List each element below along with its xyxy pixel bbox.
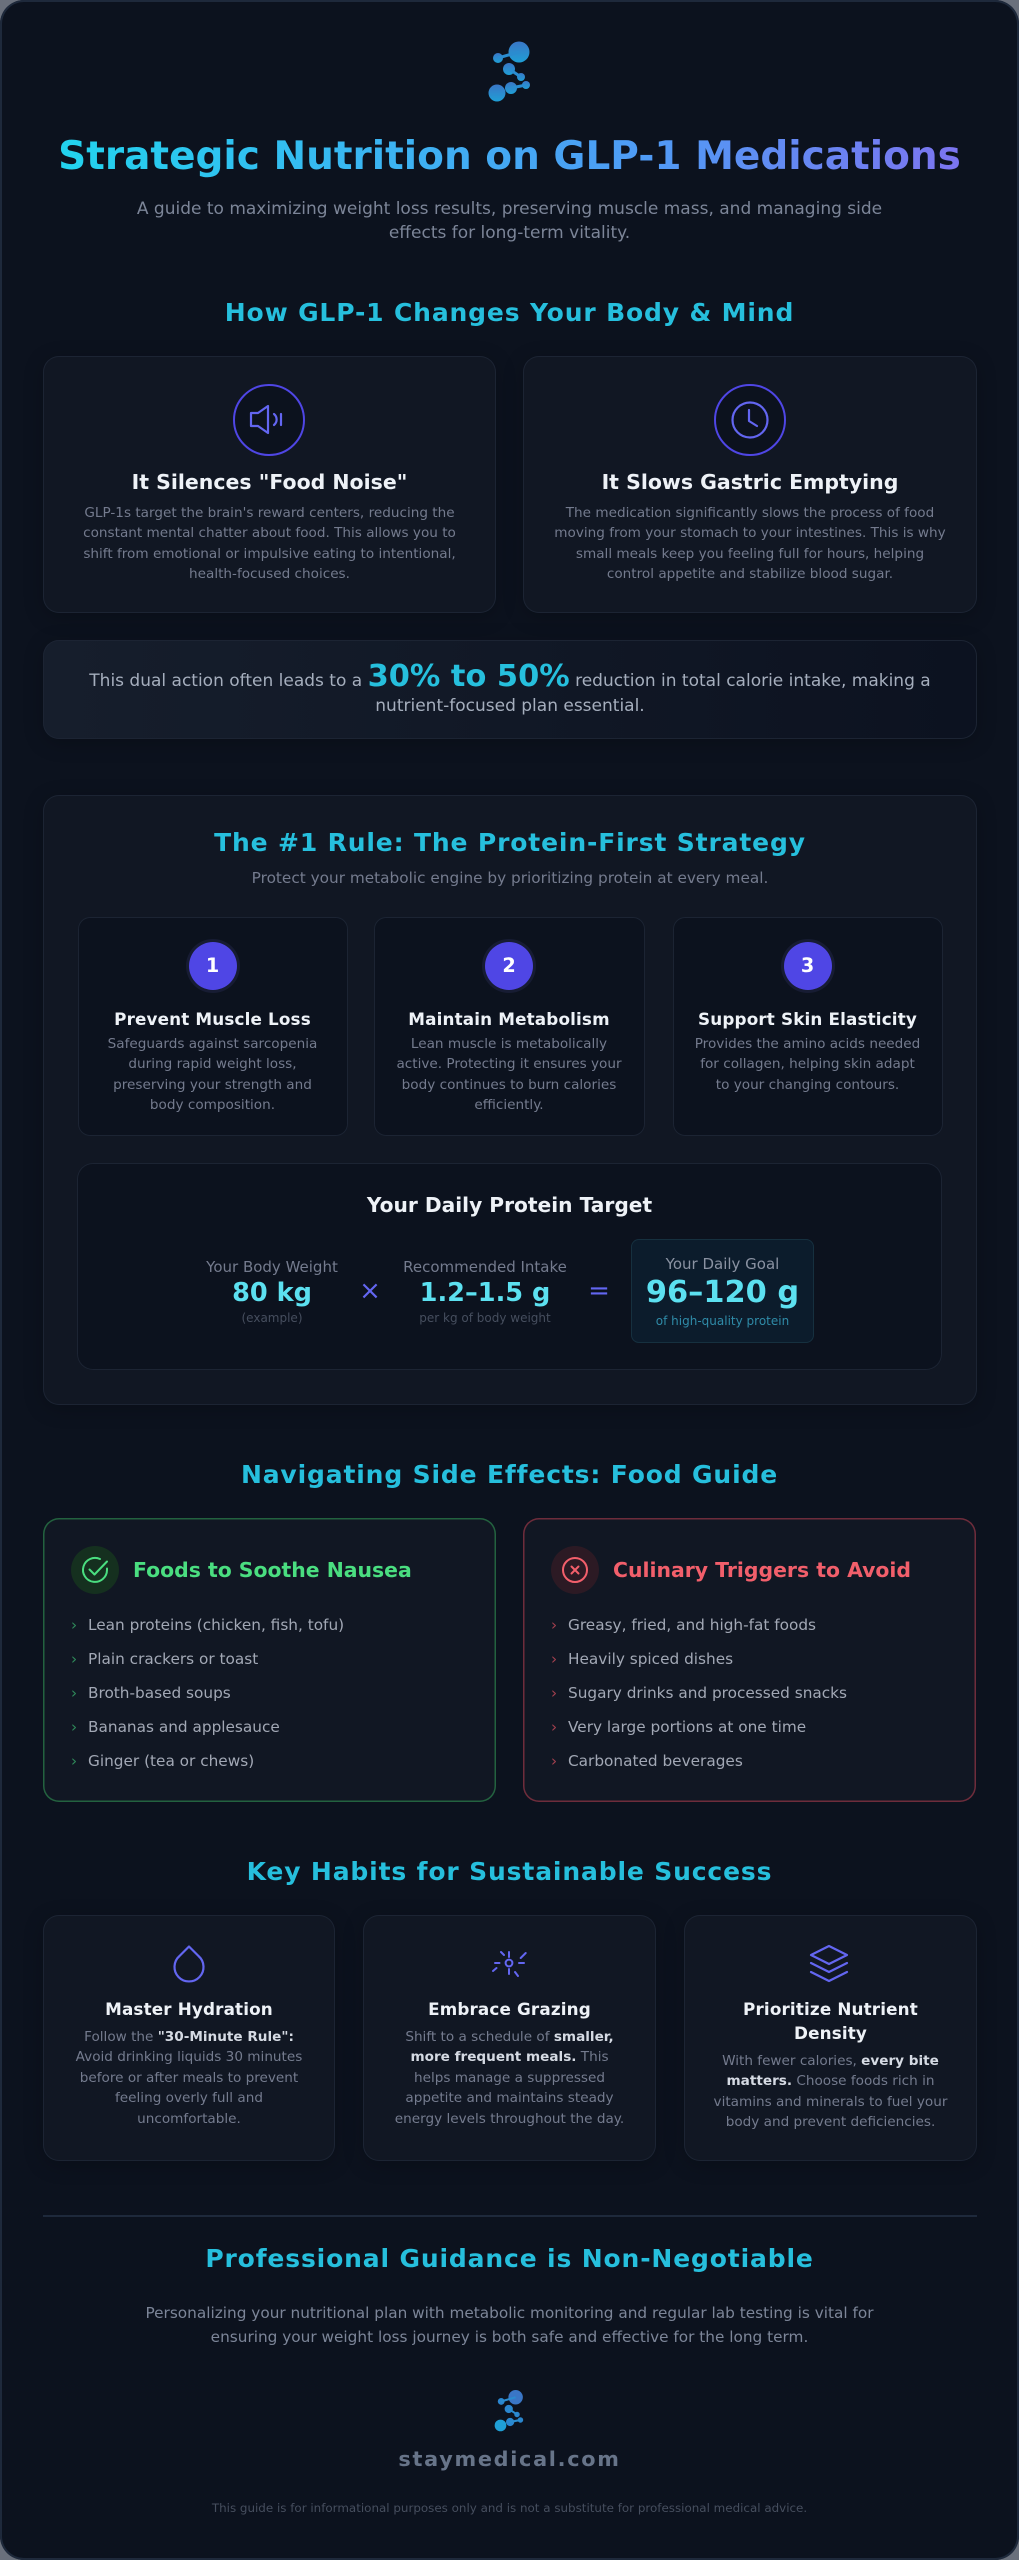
description: efficiently. (474, 1097, 544, 1113)
list: soothing foods: Broth-based soups (88, 1684, 231, 1702)
heading: Density (794, 2023, 867, 2043)
description (554, 505, 946, 582)
list: trigger foods: › (551, 1684, 557, 1702)
equation term: recommended intake (403, 1258, 567, 1325)
heading: Prioritize Nutrient (743, 1999, 918, 2019)
description: feeling overly full and (115, 2090, 263, 2106)
description: Safeguards against sarcopenia (108, 1036, 317, 1052)
list: trigger foods: › (551, 1752, 557, 1770)
heading: Your Daily Protein Target (367, 1193, 652, 1217)
description: Lean muscle is metabolically (411, 1036, 607, 1052)
icon: layers (810, 1944, 848, 1982)
heading: key habits: Key Habits for Sustainable Success (247, 1857, 772, 1886)
subtitle: effects for long-term vitality. (389, 223, 630, 243)
card: maintain metabolism (374, 917, 644, 1136)
list: soothing foods: › (71, 1616, 77, 1634)
description: vitamins and minerals to fuel your (714, 2094, 947, 2110)
number badge 3: 3 (801, 954, 814, 977)
list: trigger foods: › (551, 1718, 557, 1736)
result: daily goal (631, 1239, 814, 1343)
card: prevent muscle loss (78, 917, 348, 1136)
operator: multiply: × (359, 1276, 381, 1306)
result: daily goal: of high-quality protein (656, 1314, 789, 1328)
list: soothing foods: Plain crackers or toast (88, 1650, 258, 1668)
number badge 2 (485, 942, 533, 990)
number badge 1 (188, 942, 236, 990)
description (108, 1036, 317, 1113)
heading: It Silences "Food Noise" (132, 470, 407, 494)
heading: Prevent Muscle Loss (114, 1009, 311, 1029)
description (714, 2053, 948, 2130)
description: helps manage a suppressed (414, 2070, 605, 2086)
equation term: recommended intake: Recommended Intake (403, 1258, 567, 1276)
description: health-focused choices. (189, 566, 350, 582)
description: Shift to a schedule of smaller, (405, 2029, 614, 2045)
description: active. Protecting it ensures your (396, 1056, 622, 1072)
description (695, 1036, 920, 1093)
panel: embrace grazing (363, 1915, 656, 2161)
number badge 3 (784, 942, 832, 990)
description: matters. Choose foods rich in (727, 2073, 934, 2089)
icon: water drop (173, 1945, 205, 1982)
card: support skin elasticity (672, 917, 942, 1136)
icon: x circle (551, 1546, 599, 1594)
heading: Foods to Soothe Nausea (133, 1558, 412, 1582)
description: Follow the "30-Minute Rule": (84, 2029, 294, 2045)
list: trigger foods (551, 1616, 847, 1770)
result: daily goal: Your Daily Goal (666, 1255, 779, 1273)
description: for collagen, helping skin adapt (700, 1056, 915, 1072)
description: more frequent meals. This (410, 2049, 609, 2065)
description: small meals keep you feeling full for hours, helping (576, 546, 924, 562)
heading (743, 1999, 918, 2043)
description: shift from emotional or impulsive eating to intentional, (83, 546, 456, 562)
callout: calorie reduction (43, 640, 977, 739)
panel: gastric emptying (523, 356, 977, 613)
panel: nutrient density (684, 1915, 977, 2161)
callout text (89, 659, 931, 716)
panel: daily protein target (77, 1163, 942, 1370)
description: before or after meals to prevent (80, 2070, 298, 2086)
paragraph: guidance: Personalizing your nutritional plan with metabolic monitoring and regular lab testing is vital for (145, 2304, 874, 2322)
list: soothing foods: › (71, 1752, 77, 1770)
icon: check circle (71, 1546, 119, 1594)
list: soothing foods: Bananas and applesauce (88, 1718, 280, 1736)
description: to your changing contours. (716, 1077, 899, 1093)
subtitle (137, 199, 882, 243)
list: soothing foods: Lean proteins (chicken, fish, tofu) (88, 1616, 344, 1634)
description: constant mental chatter about food. This allows you to (83, 525, 456, 541)
description: body continues to burn calories (402, 1077, 616, 1093)
heading: The #1 Rule: The Protein-First Strategy (214, 828, 806, 857)
description: moving from your stomach to your intestines. This is why (554, 525, 946, 541)
list: soothing foods: › (71, 1650, 77, 1668)
list: trigger foods: › (551, 1650, 557, 1668)
description: Avoid drinking liquids 30 minutes (76, 2049, 302, 2065)
icon: speaker (233, 384, 305, 456)
description (396, 1036, 622, 1113)
description (395, 2029, 624, 2127)
description: GLP-1s target the brain's reward centers, reducing the (84, 505, 455, 521)
heading: navigating side effects: Navigating Side Effects: Food Guide (241, 1460, 778, 1489)
list: trigger foods: Heavily spiced dishes (568, 1650, 733, 1668)
icon: clock (714, 384, 786, 456)
equation term: body weight: Your Body Weight (206, 1258, 338, 1276)
subheading: Protect your metabolic engine by prioritizing protein at every meal. (252, 869, 768, 887)
description (76, 2029, 302, 2127)
description: body and prevent deficiencies. (726, 2114, 935, 2130)
list: trigger foods: Sugary drinks and processed snacks (568, 1684, 847, 1702)
heading: how GLP-1 changes: How GLP-1 Changes Your Body & Mind (225, 298, 794, 327)
logo: footer molecule mark (494, 2390, 524, 2432)
heading: professional guidance: Professional Guidance is Non-Negotiable (205, 2244, 814, 2273)
callout text: nutrient-focused plan essential. (375, 696, 645, 716)
list: soothing foods: › (71, 1684, 77, 1702)
equation term: body weight (206, 1258, 338, 1325)
panel: culinary triggers (523, 1518, 976, 1802)
equation term: recommended intake: 1.2–1.5 g (420, 1278, 550, 1308)
heading: It Slows Gastric Emptying (602, 470, 898, 494)
number badge 1: 1 (206, 954, 219, 977)
description: control appetite and stabilize blood sugar. (607, 566, 893, 582)
description (83, 505, 456, 582)
icon: sparkle (492, 1951, 527, 1977)
description: during rapid weight loss, (128, 1056, 297, 1072)
list: soothing foods: › (71, 1718, 77, 1736)
subtitle: A guide to maximizing weight loss results, preserving muscle mass, and managing side (137, 199, 882, 219)
heading: Embrace Grazing (428, 1999, 591, 2019)
operator: equals: = (588, 1276, 610, 1306)
equation term: recommended intake: per kg of body weight (419, 1311, 551, 1325)
disclaimer: This guide is for informational purposes only and is not a substitute for professional medical advice. (212, 2501, 807, 2515)
description: appetite and maintains steady (405, 2090, 614, 2106)
description: uncomfortable. (137, 2111, 241, 2127)
panel: master hydration (43, 1915, 335, 2161)
list: soothing foods: Ginger (tea or chews) (88, 1752, 254, 1770)
paragraph: guidance (145, 2304, 874, 2346)
title: Strategic Nutrition on GLP-1 Medications (58, 134, 961, 179)
equation term: body weight: 80 kg (232, 1278, 312, 1308)
heading: Support Skin Elasticity (698, 1009, 917, 1029)
description: energy levels throughout the day. (395, 2111, 624, 2127)
brand name: staymedical.com (398, 2447, 621, 2471)
list: trigger foods: › (551, 1616, 557, 1634)
heading: Master Hydration (105, 1999, 273, 2019)
description: preserving your strength and (113, 1077, 312, 1093)
logo: top molecule mark (488, 42, 530, 102)
list: trigger foods: Very large portions at one time (568, 1718, 806, 1736)
paragraph: guidance: ensuring your weight loss journey is both safe and effective for the long term. (211, 2328, 808, 2346)
description: The medication significantly slows the process of food (566, 505, 934, 521)
list: trigger foods: Carbonated beverages (568, 1752, 743, 1770)
description: Provides the amino acids needed (695, 1036, 920, 1052)
list: trigger foods: Greasy, fried, and high-fat foods (568, 1616, 816, 1634)
panel: foods to soothe nausea (43, 1518, 496, 1802)
panel: protein-first strategy (43, 795, 977, 1405)
panel: food noise (43, 356, 496, 613)
heading: Maintain Metabolism (408, 1009, 610, 1029)
equation term: body weight: (example) (241, 1311, 302, 1325)
description: body composition. (150, 1097, 275, 1113)
list: soothing foods (71, 1616, 344, 1770)
number badge 2: 2 (502, 954, 516, 977)
description: With fewer calories, every bite (722, 2053, 939, 2069)
result: daily goal: 96–120 g (646, 1275, 799, 1310)
heading: Culinary Triggers to Avoid (613, 1558, 911, 1582)
callout text: This dual action often leads to a 30% to 50% reduction in total calorie intake, making a (89, 659, 931, 694)
